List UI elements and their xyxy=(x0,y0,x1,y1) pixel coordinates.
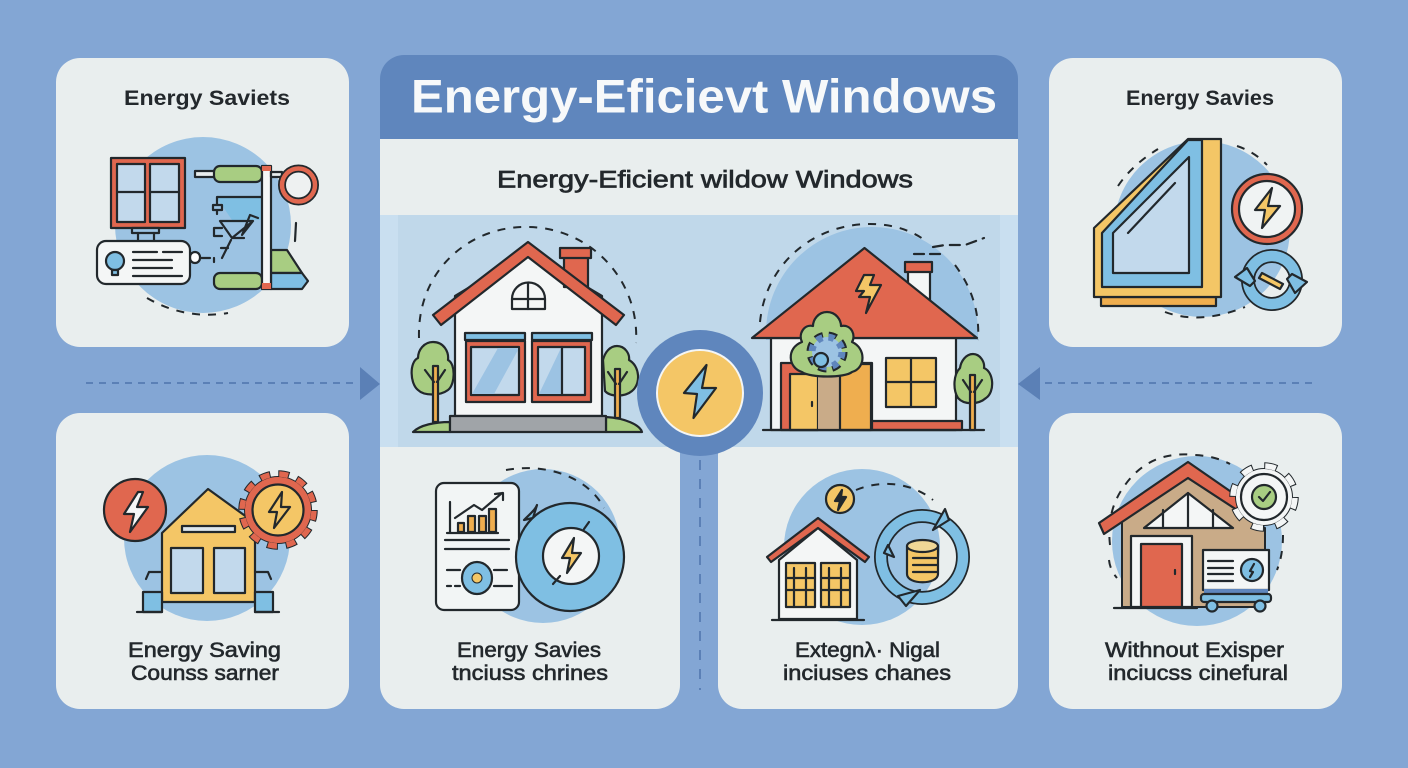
heading: top left: Energy Saviets xyxy=(124,87,290,110)
caption: bottom center right xyxy=(783,639,951,685)
title: Energy-Eficievt Windows xyxy=(411,70,997,124)
caption: bottom center left: tnciuss chrines xyxy=(452,662,608,685)
tree: right xyxy=(603,346,638,418)
badge: central energy bolt xyxy=(637,330,763,456)
panel: bottom left card xyxy=(56,413,349,709)
caption: bottom center left: Energy Savies xyxy=(457,639,601,662)
icon: window and machine xyxy=(97,137,315,315)
icon: window frame section xyxy=(1094,139,1307,317)
arrow: right dashed arrow xyxy=(1018,367,1313,400)
caption: bottom left: Counss sarner xyxy=(131,662,279,685)
panel: center main xyxy=(380,55,1018,447)
illustration: efficient house xyxy=(412,227,642,432)
caption: bottom left xyxy=(128,639,281,685)
illustration: house with gear xyxy=(752,224,992,430)
caption: bottom center left xyxy=(452,639,608,685)
panel: top left card xyxy=(56,58,349,347)
subtitle band xyxy=(380,139,1018,215)
panel: bottom right card xyxy=(1049,413,1342,709)
icon: house and storage cycle xyxy=(767,469,963,625)
tree: far right xyxy=(954,354,992,430)
tree: left xyxy=(412,342,454,422)
caption: bottom right: Withnout Exisper xyxy=(1105,639,1284,662)
connector: vertical dashed line xyxy=(699,460,701,690)
arrow: left dashed arrow xyxy=(86,367,380,400)
header band xyxy=(380,55,1018,139)
icon: report and energy dial xyxy=(436,468,624,623)
caption: bottom left: Energy Saving xyxy=(128,639,281,662)
caption: bottom right xyxy=(1105,639,1288,685)
caption: bottom center right: Extegnλ· Nigal xyxy=(795,639,940,662)
panel: top right card xyxy=(1049,58,1342,347)
panel: bottom center right card xyxy=(718,447,1018,709)
icon: house with gear xyxy=(104,455,314,621)
icon: house with gear and unit xyxy=(1099,454,1295,626)
caption: bottom center right: inciuses chanes xyxy=(783,662,951,685)
illustration band xyxy=(380,215,1018,447)
subtitle: Energy-Eficient wildow Windows xyxy=(497,166,913,194)
panel: bottom center left card xyxy=(380,447,680,709)
heading: top right: Energy Savies xyxy=(1126,87,1274,110)
caption: bottom right: inciucss cinefural xyxy=(1108,662,1288,685)
